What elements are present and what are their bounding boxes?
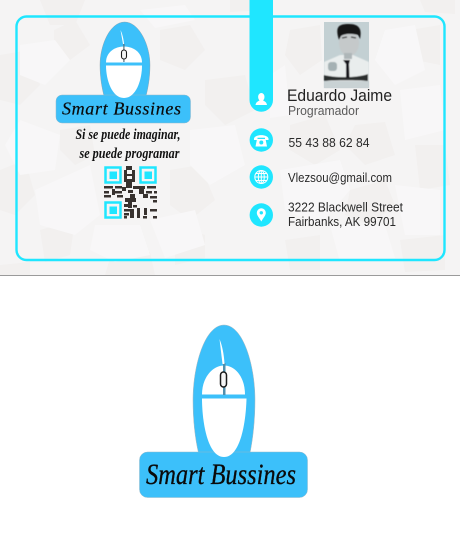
photo of Eduardo Jaime <box>324 22 369 88</box>
QR code <box>104 166 157 218</box>
large logo: mouse and Smart Bussines <box>140 325 308 498</box>
cyan ribbon with person icon <box>250 0 273 112</box>
address: Fairbanks, AK 99701 <box>288 215 396 229</box>
slogan: se puede programar <box>79 146 180 162</box>
slogan: Si se puede imaginar, <box>76 127 180 143</box>
job title: Programador <box>288 103 360 118</box>
small logo title: Smart Bussines <box>62 98 181 118</box>
address <box>288 200 404 229</box>
card bottom divider <box>0 275 460 276</box>
slogan <box>76 127 180 162</box>
icon: globe <box>250 165 273 189</box>
name: Eduardo Jaime <box>287 87 392 105</box>
icon: telephone <box>250 128 273 152</box>
address: 3222 Blackwell Street <box>288 200 404 214</box>
small logo: mouse and Smart Bussines <box>56 22 190 123</box>
icon: person <box>256 93 267 105</box>
email: Vlezsou@gmail.com <box>288 171 392 185</box>
large logo title: Smart Bussines <box>146 458 296 491</box>
card border <box>16 16 444 260</box>
phone number: 55 43 88 62 84 <box>288 136 370 150</box>
icon: location pin <box>250 203 273 227</box>
